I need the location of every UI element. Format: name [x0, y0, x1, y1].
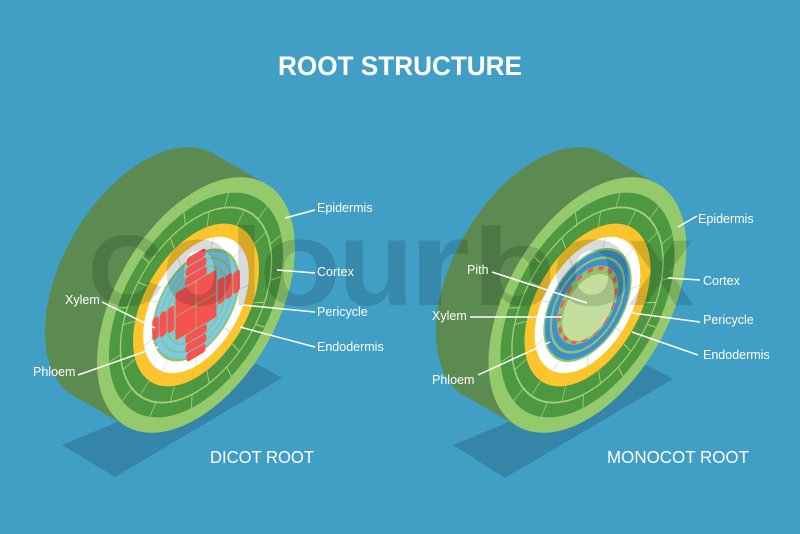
- watermark: u: [338, 195, 414, 331]
- pith: monocot: [562, 262, 614, 352]
- label: endodermis: Endodermis: [317, 340, 384, 354]
- label: phloem: Phloem: [432, 373, 474, 387]
- watermark: x: [628, 195, 694, 331]
- root side wall: dicot: [4, 113, 284, 437]
- shadow: dicot: [62, 364, 282, 477]
- watermark: C: [88, 215, 164, 327]
- label: pericycle: Pericycle: [703, 313, 754, 327]
- leader lines: dicot: [78, 210, 315, 375]
- title: ROOT STRUCTURE: [278, 51, 522, 81]
- watermark: b: [472, 206, 556, 329]
- vascular cylinder rings: monocot: [543, 228, 632, 382]
- watermark: [88, 195, 694, 331]
- label: xylem: Xylem: [65, 293, 100, 307]
- watermark: o: [259, 195, 341, 331]
- watermark: o: [551, 195, 633, 331]
- labels: monocot: [432, 212, 770, 387]
- leader lines: monocot: [470, 216, 700, 375]
- watermark: o: [162, 195, 236, 331]
- panel: dicot root illustration: [4, 113, 295, 477]
- label: xylem: Xylem: [432, 309, 467, 323]
- root cross-section: monocot: [489, 134, 686, 476]
- label: cortex: Cortex: [703, 274, 741, 288]
- label: pericycle: Pericycle: [317, 305, 368, 319]
- xylem dashes: monocot: [559, 256, 616, 354]
- caption: dicot root: DICOT ROOT: [210, 447, 314, 467]
- label: endodermis: Endodermis: [703, 348, 770, 362]
- watermark: l: [230, 206, 263, 329]
- xylem cross: dicot: [152, 228, 240, 382]
- label: epidermis: Epidermis: [698, 212, 754, 226]
- shadow: monocot: [453, 365, 673, 478]
- root side wall: monocot: [395, 113, 675, 437]
- vascular cylinder rings: dicot: [152, 229, 240, 381]
- panel: monocot root illustration: [395, 113, 686, 478]
- label: phloem: Phloem: [33, 365, 75, 379]
- watermark: r: [408, 195, 470, 331]
- label: pith: Pith: [467, 263, 489, 277]
- root cross-section: dicot: [97, 134, 295, 476]
- label: cortex: Cortex: [317, 265, 355, 279]
- labels: dicot: [33, 201, 384, 379]
- caption: monocot root: MONOCOT ROOT: [607, 447, 749, 467]
- label: epidermis: Epidermis: [317, 201, 373, 215]
